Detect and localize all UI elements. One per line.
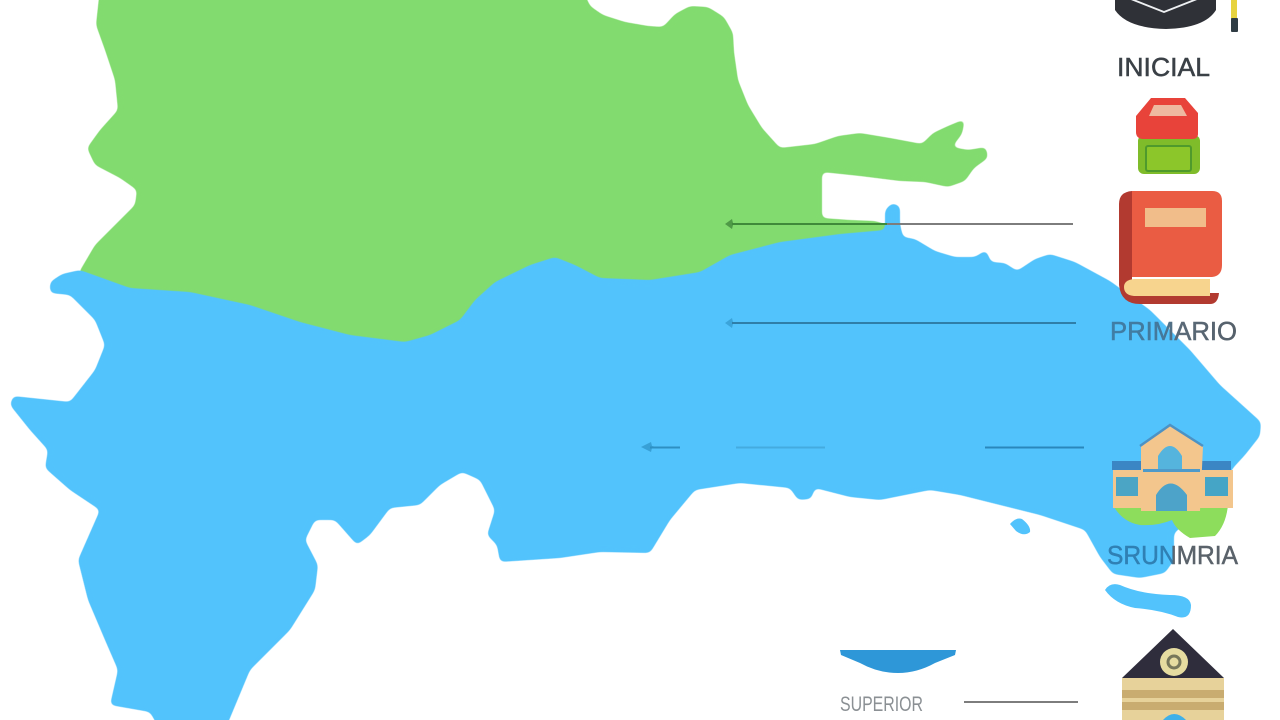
- icon: school building: [1112, 425, 1233, 538]
- label: secundaria: SRUNMRIA: [1107, 540, 1239, 570]
- icon: backpack: [1136, 98, 1200, 174]
- icon: blue dish: [840, 650, 956, 673]
- label: primario: PRIMARIO: [1110, 316, 1237, 346]
- region: northern green area: [78, 0, 988, 345]
- leader line: primario: [725, 318, 1076, 328]
- icon: graduation cap: [1115, 0, 1238, 32]
- island: small cay: [1010, 519, 1030, 534]
- leader line: superior: [964, 701, 1078, 703]
- label: inicial: INICIAL: [1117, 52, 1210, 82]
- leader line: inicial: [725, 219, 1073, 229]
- icon: red book: [1119, 191, 1222, 304]
- region: southern blue area: [10, 203, 1261, 720]
- icon: university building: [1122, 629, 1224, 720]
- leader line: secundaria: [641, 442, 1084, 452]
- label: superior: SUPERIOR: [840, 693, 923, 716]
- island: saona: [1105, 584, 1191, 618]
